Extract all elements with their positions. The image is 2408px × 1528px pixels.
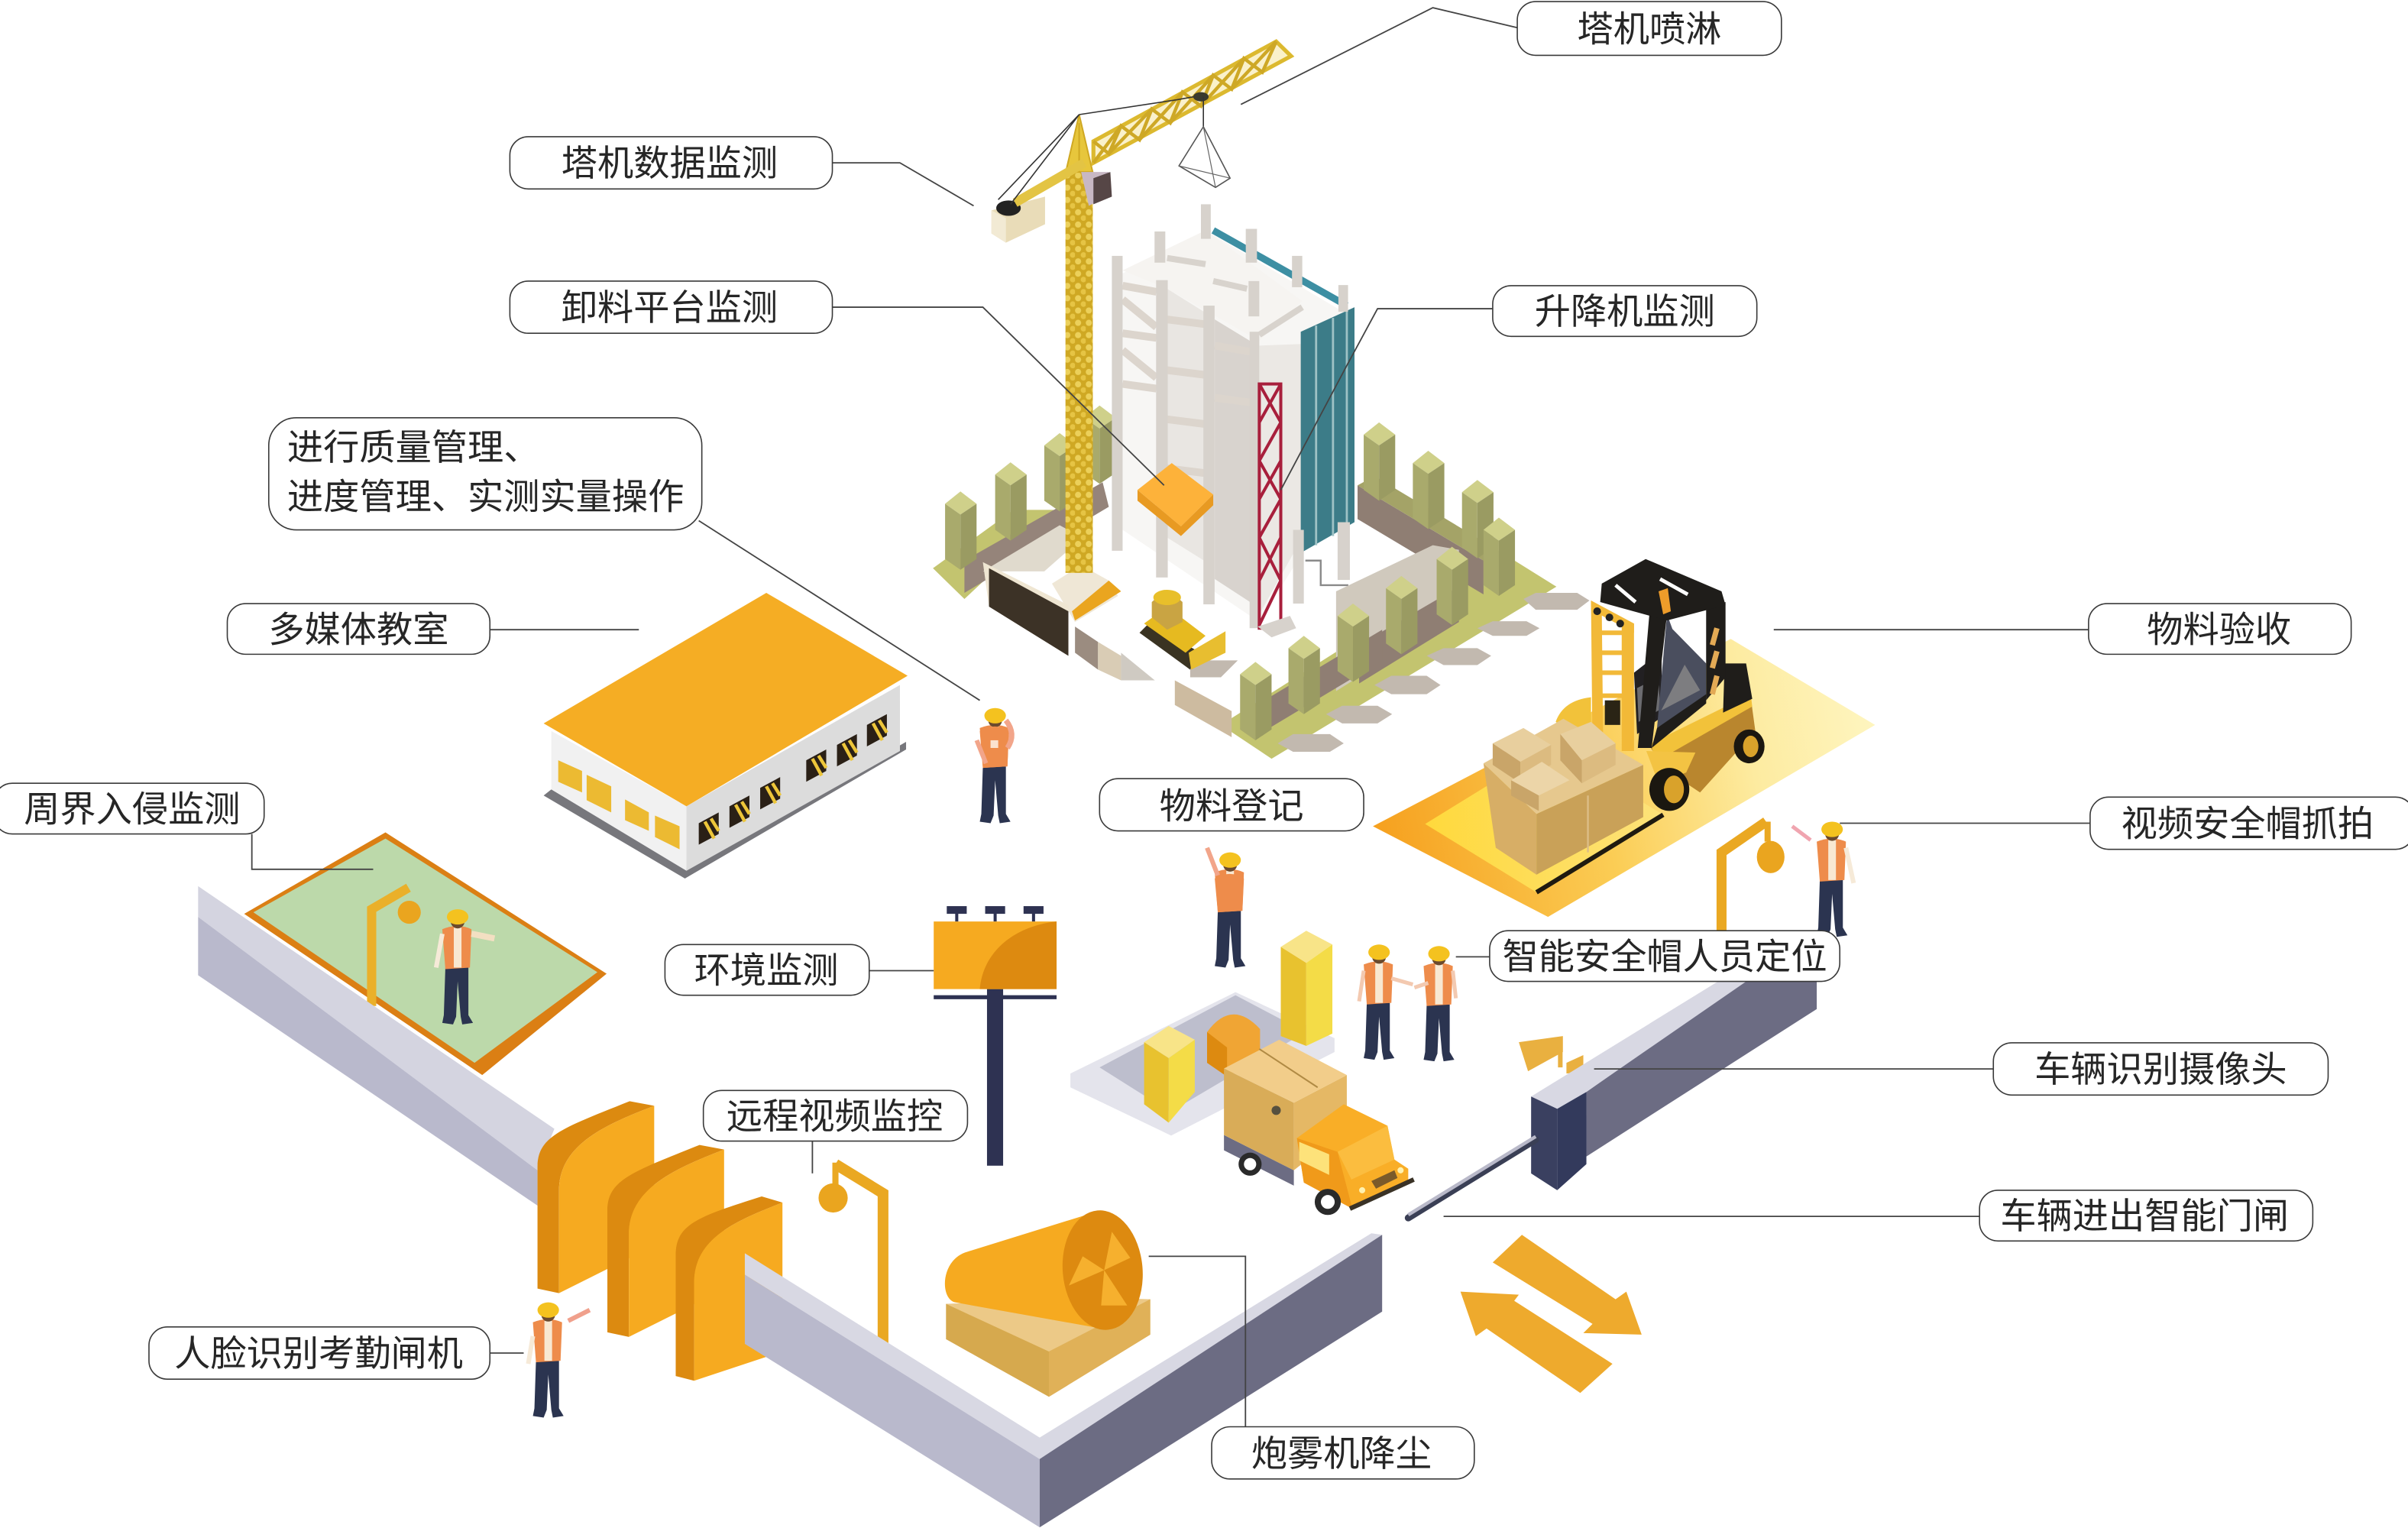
worker: perimeter (436, 909, 494, 1025)
label: remote video: 远程视频监控 (727, 1097, 943, 1138)
label: face recognition gate: 人脸识别考勤闸机 (174, 1334, 463, 1374)
label: multimedia classroom: 多媒体教室 (268, 610, 448, 650)
workers: smart helmet pair (1359, 944, 1456, 1061)
icon: forklift (1555, 559, 1765, 811)
arrow: entering traffic (1493, 1235, 1642, 1335)
storage block orange (1207, 1015, 1260, 1076)
back fence (964, 476, 1497, 594)
icon: cargo boxes on pallet (1484, 719, 1643, 875)
grey fence block (1336, 545, 1459, 691)
label: vehicle recognition camera: 车辆识别摄像头 (2034, 1050, 2287, 1090)
unloading platform (1138, 463, 1213, 536)
label: material registration (1099, 779, 1364, 831)
elevator hoist (1259, 384, 1281, 628)
site billboard (983, 562, 1068, 656)
panel: construction site (933, 41, 1590, 759)
label: material acceptance (2089, 604, 2351, 654)
label: remote video (704, 1090, 967, 1141)
label: face recognition gate (149, 1327, 490, 1379)
icon: remote video lamp (818, 1163, 883, 1344)
label: vehicle gate (1979, 1190, 2313, 1241)
panel: storage yard (1070, 931, 1335, 1135)
label: helmet capture: 视频安全帽抓拍 (2122, 804, 2374, 845)
icon: lamp by helmet capture (1721, 821, 1785, 931)
front fence panels (1075, 626, 1382, 737)
label: smart helmet positioning: 智能安全帽人员定位 (1503, 937, 1827, 977)
label: tower crane spray (1517, 2, 1782, 55)
label: helmet capture (2090, 797, 2408, 850)
left and back pillars (945, 406, 1494, 570)
storage pillar front (1144, 1026, 1195, 1122)
label: fog cannon: 炮雾机降尘 (1251, 1434, 1432, 1475)
label: multimedia classroom (228, 604, 490, 654)
label: material acceptance: 物料验收 (2147, 610, 2291, 650)
icon: vehicle barrier arm (1408, 1137, 1536, 1218)
icon: delivery truck (1224, 1040, 1414, 1215)
panel: perimeter green zone (244, 833, 607, 1075)
arrow: leaving traffic (1461, 1292, 1613, 1393)
worker: helmet capture (1792, 821, 1853, 937)
label: perimeter intrusion (0, 783, 264, 834)
building under construction (1112, 204, 1354, 628)
icon: lamp in green zone (371, 888, 421, 1006)
left perimeter wall (198, 886, 555, 1206)
label: vehicle recognition camera (1993, 1043, 2328, 1095)
label: unloading platform (510, 281, 833, 333)
icon: face recognition gates (538, 1101, 782, 1381)
gate wall and pillar (1531, 979, 1817, 1190)
storage pillar back (1281, 931, 1332, 1046)
pillar shadows (1190, 593, 1590, 752)
label: unloading platform: 卸料平台监测 (562, 288, 778, 329)
label: quality and progress: 进度管理、实测实量操作 (287, 477, 684, 517)
icon: fog cannon (945, 1207, 1151, 1397)
label: quality and progress: 进行质量管理、 (287, 428, 539, 468)
hoist base and pipe (1257, 561, 1348, 637)
front perimeter wall (745, 1233, 1382, 1527)
panel: material acceptance floor (1373, 639, 1875, 917)
label: quality and progress (269, 418, 702, 530)
label: environment monitoring: 环境监测 (694, 951, 839, 992)
front pillars (1240, 517, 1515, 740)
tower crane (992, 41, 1291, 573)
bulldozer (1140, 590, 1225, 669)
label: tower crane data (510, 137, 833, 189)
label: tower crane spray: 塔机喷淋 (1578, 9, 1721, 50)
icon: environment monitoring billboard (934, 906, 1057, 1166)
label: tower crane data: 塔机数据监测 (562, 144, 778, 184)
label: vehicle gate: 车辆进出智能门闸 (2000, 1196, 2289, 1237)
label: hoist monitoring (1493, 286, 1757, 336)
worker: attendance gate (529, 1303, 590, 1417)
crane base (1052, 565, 1121, 622)
label: perimeter intrusion: 周界入侵监测 (24, 789, 241, 830)
icon: vehicle camera (1519, 1036, 1584, 1073)
label: fog cannon (1212, 1427, 1474, 1479)
worker: quality management (976, 708, 1011, 823)
leader lines (252, 8, 2090, 1427)
label: environment monitoring (665, 944, 869, 995)
worker: material registration (1207, 848, 1245, 967)
site ground strip (933, 510, 1556, 759)
label: material registration: 物料登记 (1160, 786, 1304, 827)
panel: multimedia classroom building (544, 593, 908, 879)
label: hoist monitoring: 升降机监测 (1535, 292, 1715, 332)
